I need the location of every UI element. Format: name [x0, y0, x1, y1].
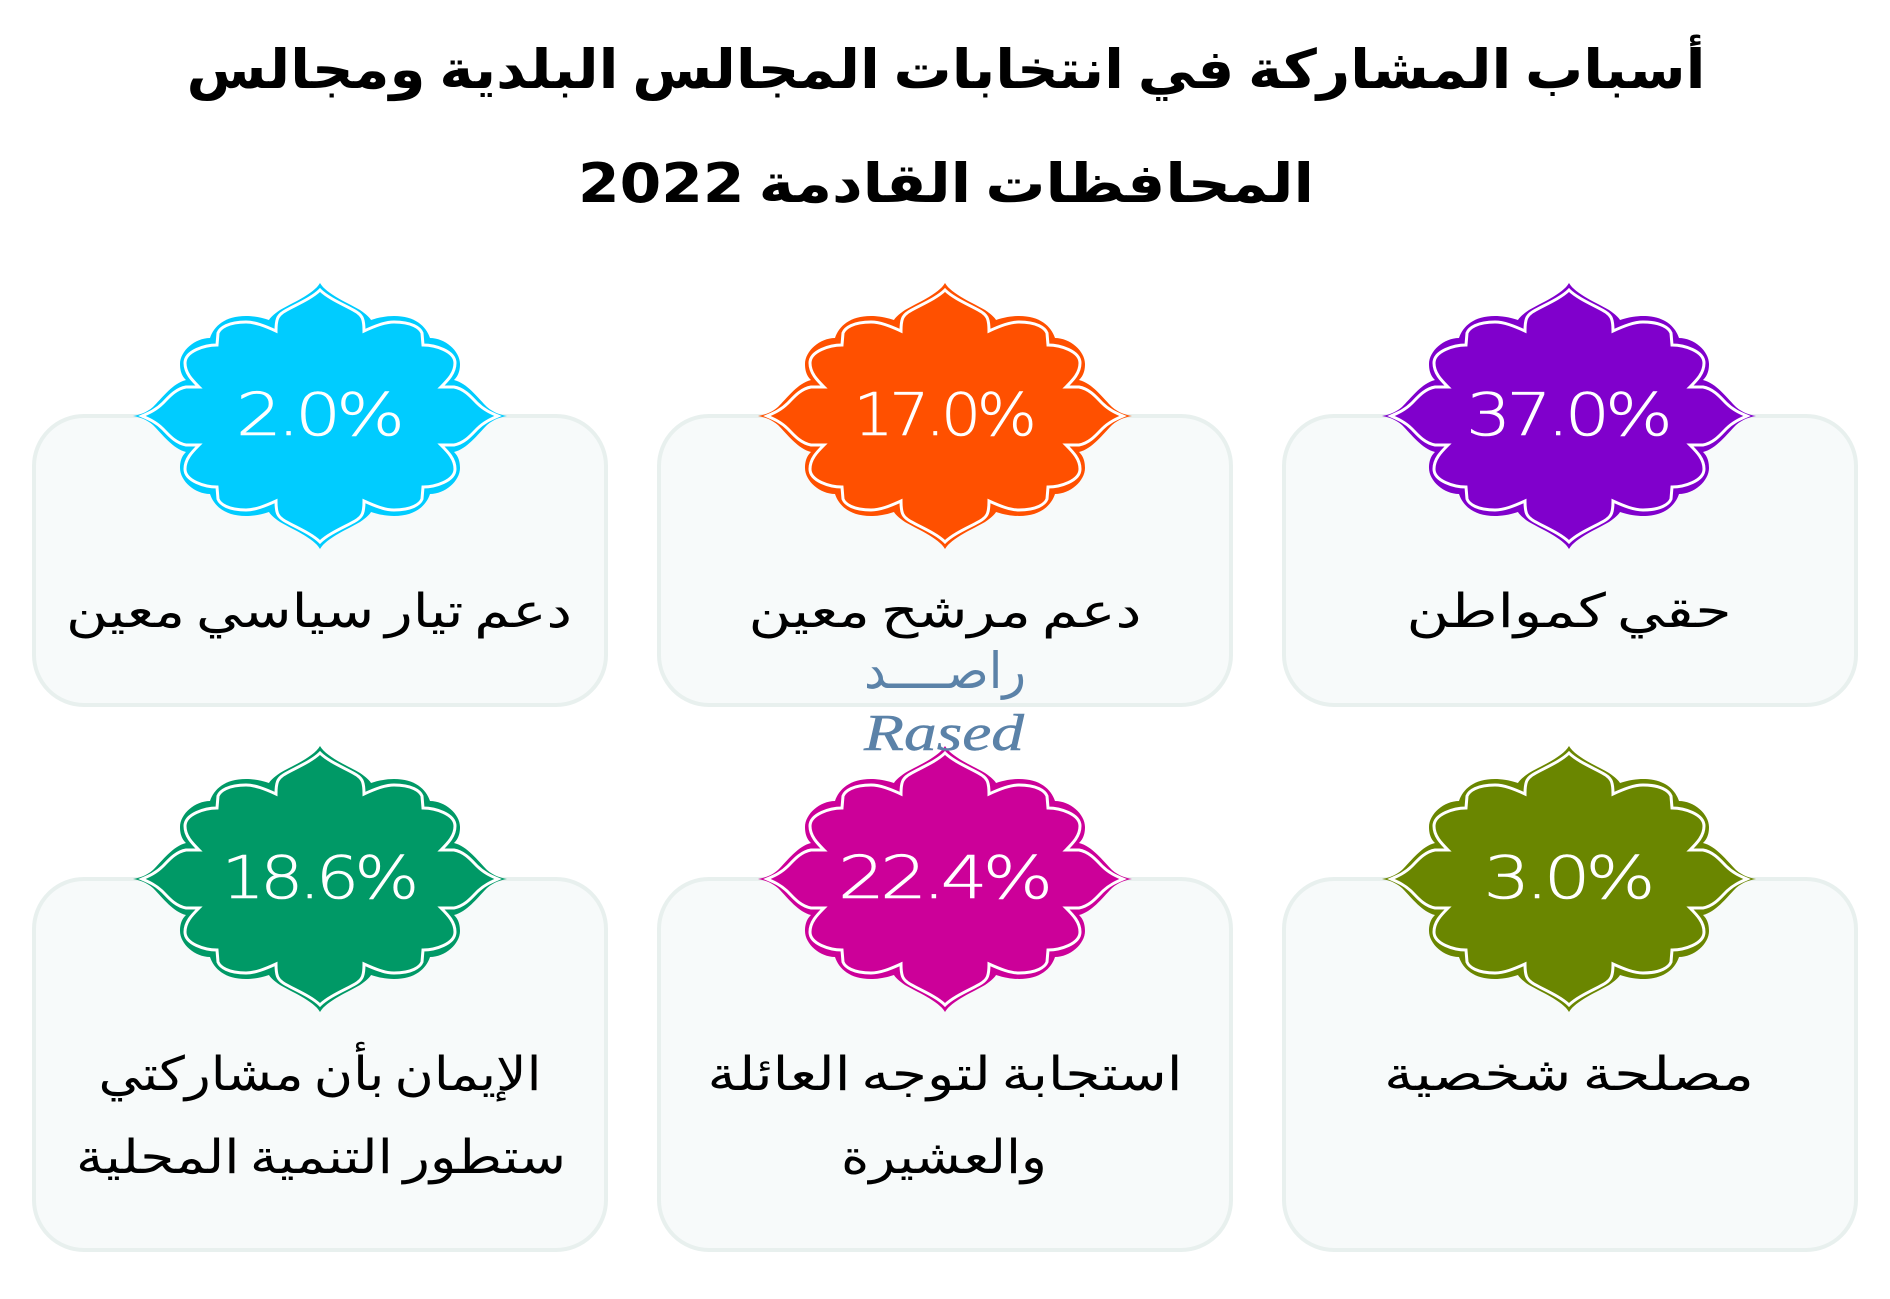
watermark: Rased logo: Rased — [863, 705, 1025, 762]
badge: 17.0% — [758, 283, 1132, 549]
label — [76, 1041, 566, 1185]
label: دعم تيار سياسي معين — [66, 584, 572, 639]
badge: 2.0% — [133, 283, 507, 549]
badge: 18.6%: 18.6% — [221, 843, 415, 912]
panel: right to vote as a citizen — [1284, 283, 1856, 705]
label: مصلحة شخصية — [1384, 1047, 1754, 1102]
badge: 18.6% — [133, 746, 507, 1012]
watermark: Rased logo: راصــــد — [864, 642, 1026, 700]
badge: 2.0%: 2.0% — [236, 380, 400, 449]
label: استجابة لتوجه العائلة — [708, 1047, 1182, 1102]
badge: 3.0% — [1382, 746, 1756, 1012]
panel: personal interest — [1284, 746, 1856, 1250]
label: ستطور التنمية المحلية — [76, 1130, 566, 1185]
title: المحافظات القادمة 2022 — [578, 152, 1314, 215]
panel: support a political current — [34, 283, 606, 705]
title — [186, 34, 1706, 215]
panel: belief in local development — [34, 746, 606, 1250]
badge: 22.4% — [758, 746, 1132, 1012]
label — [708, 1047, 1182, 1185]
label: والعشيرة — [841, 1130, 1047, 1185]
panel: support a specific candidate — [659, 283, 1231, 705]
badge: 37.0%: 37.0% — [1466, 380, 1668, 449]
watermark: Rased logo — [863, 642, 1026, 762]
badge: 22.4%: 22.4% — [838, 843, 1048, 912]
label: حقي كمواطن — [1406, 584, 1732, 639]
title: أسباب المشاركة في انتخابات المجالس البلدية ومجالس — [186, 34, 1706, 101]
panel: family and clan direction — [659, 746, 1231, 1250]
badge: 17.0%: 17.0% — [853, 380, 1033, 449]
badge: 37.0% — [1382, 283, 1756, 549]
badge: 3.0%: 3.0% — [1484, 843, 1650, 912]
label: دعم مرشح معين — [748, 584, 1142, 639]
label: الإيمان بأن مشاركتي — [98, 1041, 542, 1102]
